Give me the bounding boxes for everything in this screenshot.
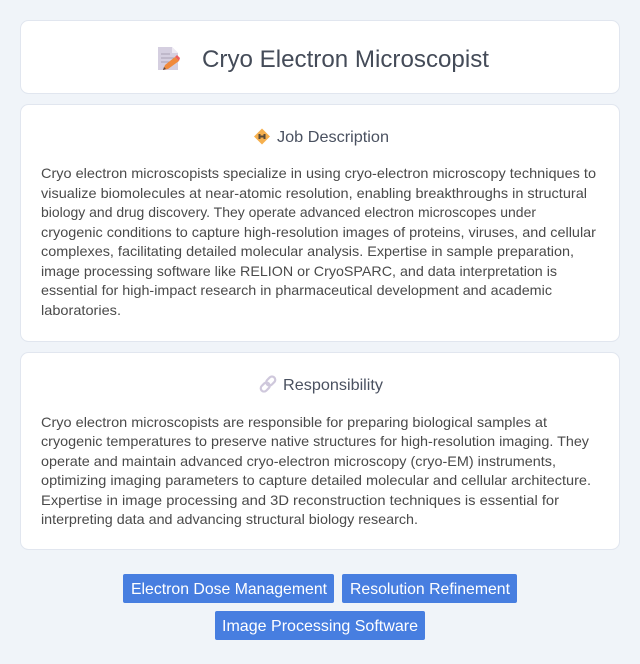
panel: responsibility [20, 352, 620, 550]
text block: job description: complexes, facilitating detailed molecular analysis. Expertise in sample preparation, [41, 243, 574, 259]
tag: image processing software: Image Processing Software [222, 618, 418, 635]
icon: chain link [259, 375, 277, 393]
text block: responsibility: operate and maintain advanced cryo-electron microscopy (cryo-EM) instruments, [41, 453, 556, 469]
heading: job description: Job Description [277, 129, 389, 146]
text block: job description: cryogenic conditions to capture high-resolution images of proteins, viruses, and cellular [41, 224, 596, 240]
tag: image processing software [215, 611, 425, 640]
icon: document with pencil [158, 47, 180, 70]
title: Cryo Electron Microscopist [202, 46, 489, 73]
text block: responsibility: optimizing imaging parameters to capture detailed molecular and cellular architecture. [41, 472, 591, 488]
text block: responsibility: cryogenic temperatures to preserve native structures for high-resolution imaging. They [41, 433, 589, 449]
text block: responsibility: interpreting data and advancing structural biology research. [41, 511, 418, 527]
heading: responsibility: Responsibility [283, 377, 383, 394]
text block: job description: image processing software like RELION or CryoSPARC, and data interpretation is [41, 263, 557, 279]
tag: resolution refinement: Resolution Refinement [350, 581, 511, 598]
text block: job description [41, 165, 596, 318]
tag: electron dose management [123, 574, 334, 603]
text block: job description: biology and drug discovery. They operate advanced electron microscopes under [41, 204, 536, 220]
text block: responsibility: Cryo electron microscopists are responsible for preparing biological samples at [41, 414, 547, 430]
text block: responsibility: Expertise in image processing and 3D reconstruction techniques is essential for [41, 492, 559, 508]
text block: responsibility [41, 414, 591, 527]
text block: job description: visualize biomolecules at near-atomic resolution, enabling breakthroughs in structural [41, 185, 587, 201]
tag: electron dose management: Electron Dose Management [131, 581, 328, 598]
text block: job description: Cryo electron microscopists specialize in using cryo-electron microscopy techniques to [41, 165, 596, 181]
icon: orange diamond [254, 128, 270, 144]
text block: job description: laboratories. [41, 302, 121, 318]
panel: job description [20, 104, 620, 342]
text block: job description: essential for high-impact research in pharmaceutical development and academic [41, 282, 552, 298]
title card [20, 20, 620, 94]
tag: resolution refinement [342, 574, 517, 603]
